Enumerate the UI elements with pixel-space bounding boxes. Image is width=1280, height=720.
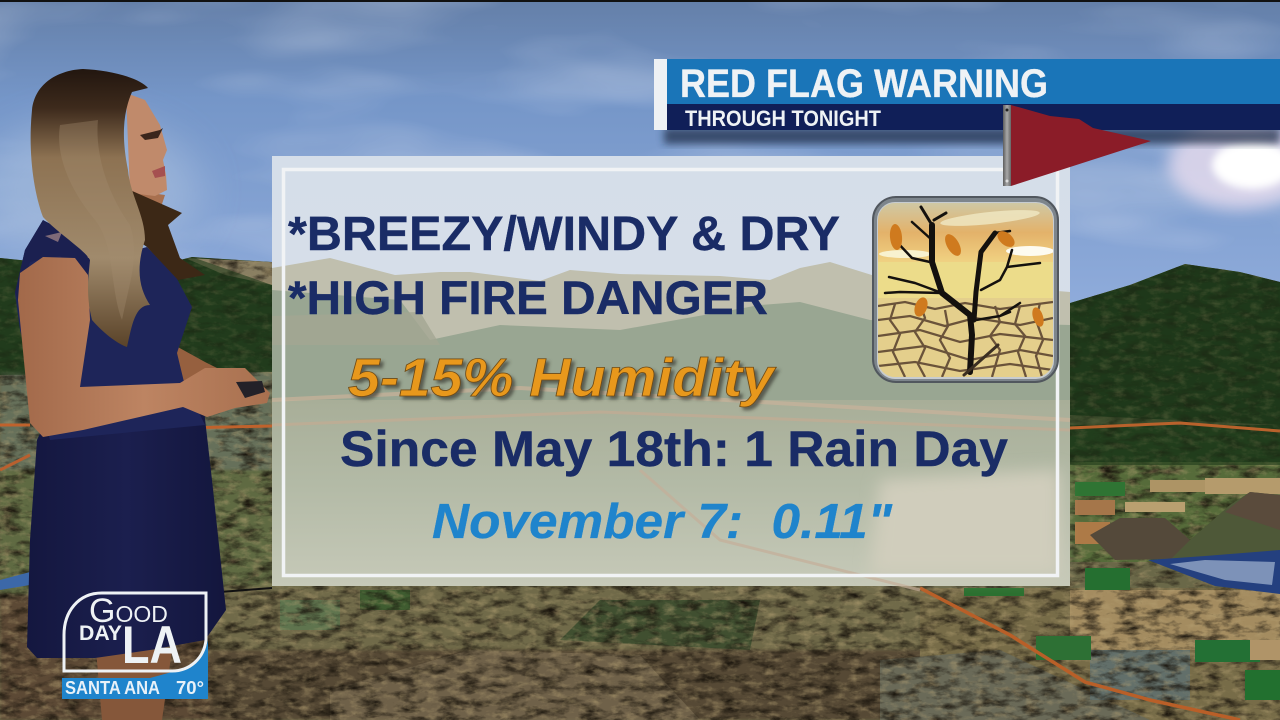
logo wordmark: G bbox=[89, 592, 115, 630]
panel: translucent info box bbox=[272, 156, 1070, 590]
heading line: breezy windy and dry: *BREEZY/WINDY & DRY bbox=[288, 208, 840, 261]
rainfall date text: November 7: 0.11" bbox=[432, 495, 893, 549]
lower right fields bbox=[920, 588, 1280, 720]
road lines bbox=[920, 588, 1240, 720]
hair back strands bbox=[130, 190, 205, 280]
terrain bbox=[0, 250, 1280, 720]
left mountains bbox=[0, 257, 272, 375]
right fields bbox=[1070, 462, 1280, 562]
tree bbox=[885, 207, 1040, 375]
remote control bbox=[236, 381, 265, 398]
legs bbox=[96, 650, 172, 720]
bodice and sleeve bbox=[15, 220, 205, 440]
green mountain wash bbox=[1070, 264, 1280, 465]
banner: red flag warning bbox=[654, 59, 1280, 144]
logo: Good Day LA: 70° bbox=[176, 678, 204, 698]
lips bbox=[152, 166, 165, 178]
right hills bbox=[1090, 518, 1200, 560]
logo location and temperature: SANTA ANA bbox=[65, 678, 160, 698]
skirt bbox=[27, 410, 226, 658]
presenter bbox=[15, 69, 270, 720]
face bbox=[126, 93, 167, 196]
back arm bbox=[176, 346, 225, 385]
rain day text: Since May 18th: 1 Rain Day bbox=[340, 421, 1008, 477]
logo wordmark: OOD bbox=[115, 601, 168, 627]
humidity text: 5-15% Humidity bbox=[348, 348, 777, 408]
terrain texture bbox=[0, 250, 1280, 720]
panel background mountains bbox=[272, 258, 1070, 340]
neck bbox=[130, 190, 165, 240]
hair bbox=[31, 69, 150, 347]
lower middle fields bbox=[209, 586, 274, 651]
logo: Good Day LA: DAY bbox=[79, 622, 122, 645]
arm and hand bbox=[18, 257, 270, 437]
right mountains bbox=[1070, 264, 1280, 425]
banner title: RED FLAG WARNING bbox=[680, 62, 1048, 106]
heading line: high fire danger: *HIGH FIRE DANGER bbox=[288, 271, 768, 324]
logo: Good Day LA bbox=[62, 592, 208, 699]
sun glare bbox=[1168, 121, 1280, 209]
logo: Good Day LA: LA bbox=[122, 616, 182, 675]
cracked ground bbox=[878, 302, 1053, 377]
icon: red flag bbox=[1003, 105, 1151, 186]
icon: dry tree on cracked earth bbox=[873, 197, 1058, 382]
lake bbox=[1148, 550, 1280, 594]
leaves bbox=[889, 224, 1046, 328]
field patches bbox=[1150, 480, 1205, 492]
sky background bbox=[0, 0, 1280, 340]
banner subtitle: THROUGH TONIGHT bbox=[685, 106, 882, 131]
panel inner border bbox=[284, 170, 1058, 576]
eye bbox=[140, 128, 163, 140]
